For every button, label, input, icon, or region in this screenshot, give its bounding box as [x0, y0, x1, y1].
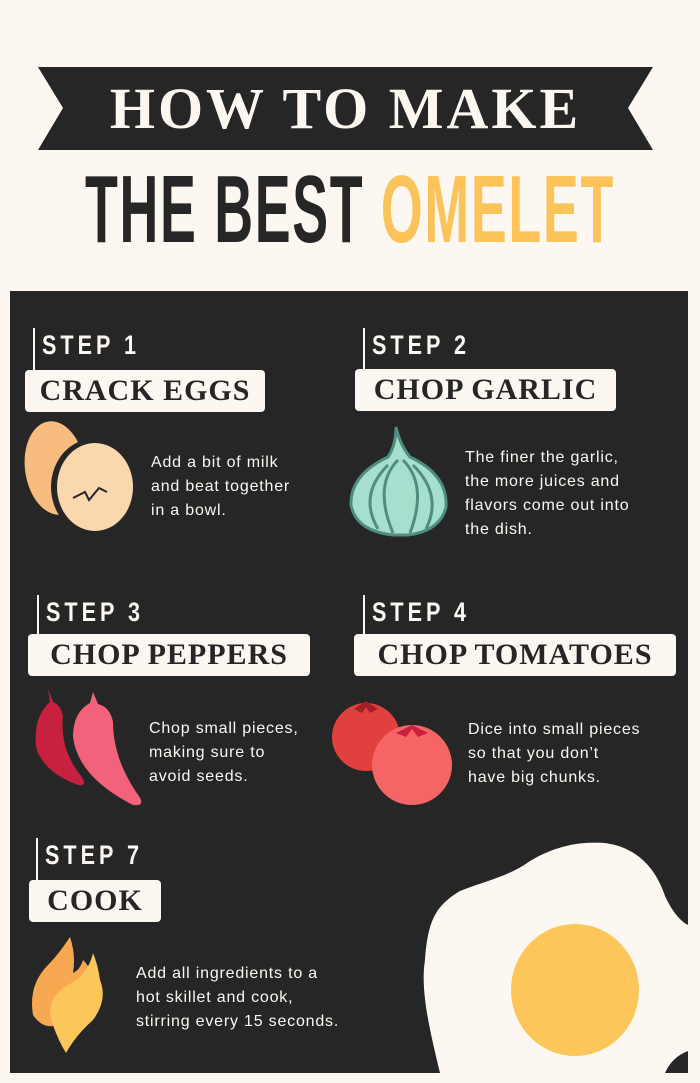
dark panel — [10, 291, 688, 1073]
step 2 — [350, 328, 629, 538]
text — [151, 454, 290, 519]
label: chop garlic — [355, 369, 616, 411]
fried egg — [424, 842, 688, 1073]
text: Add a bit of milk — [151, 454, 278, 471]
label: chop garlic: CHOP GARLIC — [374, 373, 597, 406]
text: hot skillet and cook, — [136, 989, 293, 1006]
label: chop tomatoes — [354, 634, 676, 676]
text: so that you don’t — [468, 745, 599, 762]
text: the dish. — [465, 521, 533, 538]
label: crack eggs: CRACK EGGS — [40, 374, 250, 407]
icon: eggs — [24, 421, 133, 531]
text: the more juices and — [465, 473, 620, 490]
label: cook — [29, 880, 161, 922]
label: cook: COOK — [47, 884, 143, 917]
icon: tomatoes — [332, 701, 452, 805]
text: The finer the garlic, — [465, 449, 619, 466]
text: Add all ingredients to a — [136, 965, 318, 982]
step 7 — [29, 838, 339, 1053]
step 2: STEP 2 — [372, 330, 470, 360]
label: chop tomatoes: CHOP TOMATOES — [377, 638, 653, 671]
step 7: STEP 7 — [45, 840, 143, 870]
label: crack eggs — [25, 370, 265, 412]
text: avoid seeds. — [149, 768, 248, 785]
text: Chop small pieces, — [149, 720, 299, 737]
text: making sure to — [149, 744, 265, 761]
text — [149, 720, 299, 785]
text — [465, 449, 629, 538]
step 4: STEP 4 — [372, 597, 470, 627]
text: flavors come out into — [465, 497, 629, 514]
step 4 — [332, 595, 676, 805]
text: and beat together — [151, 478, 290, 495]
icon: garlic — [350, 426, 448, 536]
text: Dice into small pieces — [468, 721, 640, 738]
step 1 — [24, 328, 290, 531]
label: chop peppers: CHOP PEPPERS — [50, 638, 288, 671]
label: chop peppers — [28, 634, 310, 676]
banner: how to make — [38, 67, 653, 150]
text — [136, 965, 339, 1030]
title: the best omelet: THE BEST OMELET — [85, 156, 615, 263]
step 3: STEP 3 — [46, 597, 144, 627]
text: in a bowl. — [151, 502, 227, 519]
step 1: STEP 1 — [42, 330, 140, 360]
icon: peppers — [36, 689, 142, 806]
step 3 — [28, 595, 310, 806]
banner: how to make: HOW TO MAKE — [110, 76, 581, 141]
text — [468, 721, 640, 786]
text: stirring every 15 seconds. — [136, 1013, 339, 1030]
icon: flame — [32, 937, 103, 1053]
text: have big chunks. — [468, 769, 601, 786]
